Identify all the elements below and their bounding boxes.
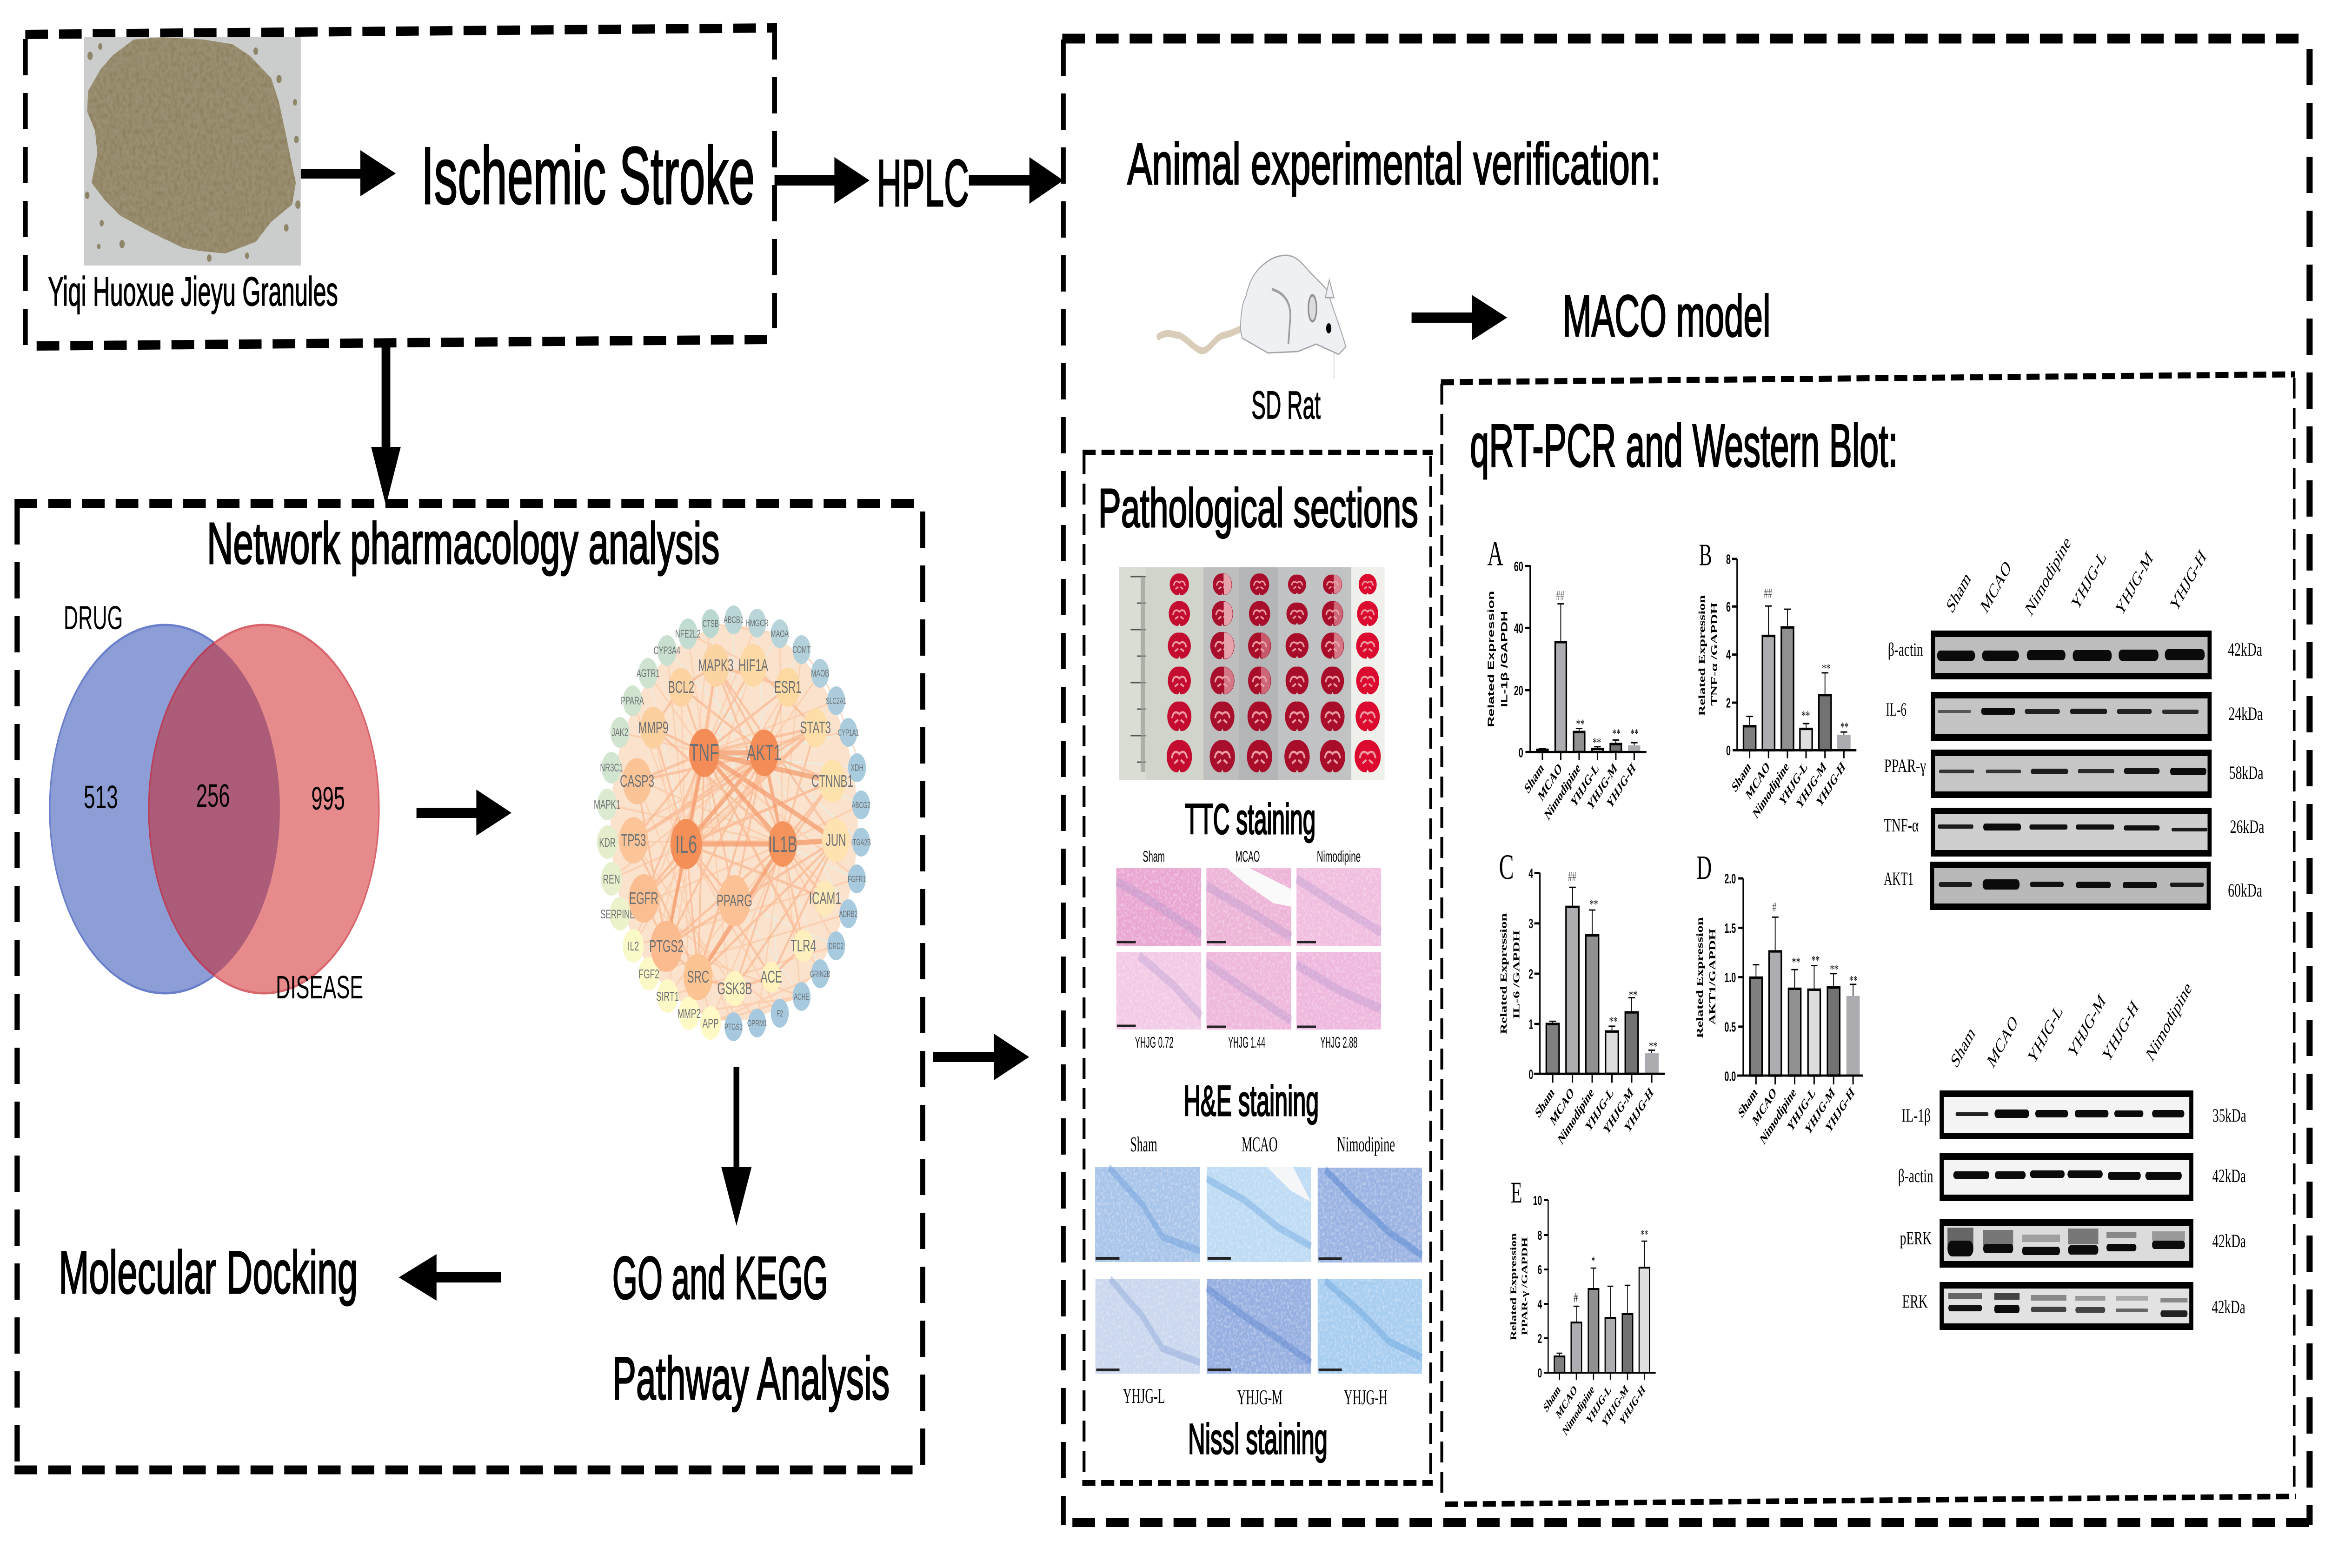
bar chart D: AKT1: Nimodipine xyxy=(1758,1084,1798,1148)
bar chart A: IL-1 beta xyxy=(1486,533,1647,823)
bar chart B: TNF alpha: Sham xyxy=(1730,758,1753,795)
bar chart A: IL-1 beta: 40 xyxy=(1514,621,1523,636)
lane labels: second blot: YHJG-M xyxy=(2066,990,2108,1063)
outer ring nodes: PTGS1 xyxy=(724,1023,743,1032)
bar chart D: AKT1: 2.0 xyxy=(1724,871,1736,887)
bar chart D: AKT1: ** xyxy=(1811,954,1820,968)
H&E group labels: MCAO xyxy=(1236,848,1260,865)
molecular weights: first set xyxy=(2228,639,2265,901)
middle ring nodes: ACE xyxy=(761,968,782,986)
molecular weights: first set: 60kDa xyxy=(2228,880,2262,901)
arrow: enrichment to docking xyxy=(399,1254,501,1301)
blot strips: second set xyxy=(1942,1094,2191,1327)
protein labels: first set: PPAR-γ xyxy=(1884,756,1926,777)
H&E group labels: Nimodipine xyxy=(1317,848,1361,865)
heading: network pharmacology: Network pharmacology analysis xyxy=(207,511,720,577)
protein labels: second set: IL-1β xyxy=(1901,1105,1931,1126)
outer ring nodes: APP xyxy=(703,1016,719,1030)
hub nodes: IL6 xyxy=(675,830,697,858)
bar chart D: AKT1: YHJG-L xyxy=(1786,1084,1817,1135)
protein labels: first set: AKT1 xyxy=(1884,869,1913,890)
network edges xyxy=(607,620,861,1027)
dashed frame: animal panel xyxy=(1062,39,2312,1525)
bar chart E: PPAR gamma: 10 xyxy=(1533,1193,1542,1208)
panel: pathological sections xyxy=(1083,452,1433,1486)
Nissl group labels: MCAO xyxy=(1242,1133,1278,1156)
protein labels: second set: pERK xyxy=(1900,1228,1932,1249)
outer ring nodes: MAOB xyxy=(811,668,829,679)
bar chart C: IL-6: C xyxy=(1499,847,1514,887)
venn diagram xyxy=(50,599,379,1006)
bar chart E: PPAR gamma: Sham xyxy=(1541,1382,1562,1415)
bar chart B: TNF alpha: 4 xyxy=(1726,648,1731,663)
lane labels: first blot: Sham xyxy=(1943,567,1973,617)
panel: network pharmacology analysis xyxy=(14,504,923,1474)
lane labels: second blot xyxy=(1948,977,2194,1072)
label: MACO model: MACO model xyxy=(1563,284,1771,349)
bar chart C: IL-6: YHJG-L xyxy=(1584,1084,1615,1135)
outer ring nodes: HMGCR xyxy=(745,618,769,629)
Nissl group labels: Nimodipine xyxy=(1337,1133,1395,1156)
bar chart C: IL-6 xyxy=(1499,847,1665,1148)
Nissl group labels: YHJG-H xyxy=(1344,1386,1388,1409)
bar chart A: IL-1 beta: ## xyxy=(1556,589,1564,603)
outer ring nodes: CYP1A1 xyxy=(838,728,859,738)
molecular weights: first set: 58kDa xyxy=(2229,763,2264,784)
lane labels: first blot: Nimodipine xyxy=(2022,531,2073,620)
H&E group labels xyxy=(1135,848,1361,1051)
bar chart A: IL-1 beta: ** xyxy=(1576,718,1584,732)
outer ring nodes: F2 xyxy=(777,1009,783,1019)
middle ring nodes xyxy=(619,644,853,1006)
protein labels: second set: ERK xyxy=(1902,1291,1928,1312)
western blot: first membrane set xyxy=(1884,531,2265,907)
venn diagram: DRUG xyxy=(64,599,123,637)
bar chart D: AKT1: # xyxy=(1772,900,1776,915)
Nissl group labels: YHJG-M xyxy=(1237,1386,1282,1409)
outer ring nodes: IL2 xyxy=(628,939,639,953)
heading: animal experimental verification: Animal experimental verification: xyxy=(1127,132,1661,197)
middle ring nodes: ICAM1 xyxy=(809,890,841,908)
bar chart C: IL-6: Related Expression xyxy=(1499,913,1508,1034)
bar chart B: TNF alpha xyxy=(1697,538,1856,822)
bar chart C: IL-6: Sham xyxy=(1533,1084,1556,1121)
bar chart B: TNF alpha: YHJG-H xyxy=(1814,758,1847,811)
bar chart E: PPAR gamma: 4 xyxy=(1538,1297,1542,1311)
bar chart A: IL-1 beta: 20 xyxy=(1514,684,1523,698)
heading: qRT-PCR and Western Blot: qRT-PCR and Western Blot: xyxy=(1470,412,1898,479)
middle ring nodes: PPARG xyxy=(717,892,752,910)
Nissl group labels: YHJG-L xyxy=(1123,1384,1165,1408)
panel: animal experimental verification xyxy=(1062,39,2312,1525)
bar charts A to D xyxy=(1486,533,1863,1148)
outer ring nodes: ITGA2B xyxy=(851,838,871,848)
lane labels: first blot: MCAO xyxy=(1978,556,2014,617)
outer ring nodes: OPRM1 xyxy=(747,1019,767,1029)
outer ring nodes: ABCB1 xyxy=(724,614,744,625)
bar chart C: IL-6: 1 xyxy=(1528,1017,1533,1032)
bar chart E: PPAR gamma: YHJG-M xyxy=(1601,1382,1630,1430)
bar chart E: PPAR gamma: YHJG-L xyxy=(1585,1382,1613,1428)
bar chart E: PPAR gamma: E xyxy=(1511,1176,1522,1209)
lane labels: second blot: YHJG-L xyxy=(2025,999,2065,1068)
molecular weights: first set: 24kDa xyxy=(2228,704,2263,724)
middle ring nodes: CASP3 xyxy=(620,772,654,791)
bar chart A: IL-1 beta: ** xyxy=(1612,727,1621,742)
bar chart D: AKT1 xyxy=(1695,849,1863,1148)
arrow: network to enrichment xyxy=(721,1067,751,1226)
outer ring nodes: KDR xyxy=(599,836,616,850)
H&E group labels: YHJG 2.88 xyxy=(1320,1034,1357,1051)
bar chart D: AKT1: MCAO xyxy=(1751,1084,1778,1129)
micrographs: H&E staining xyxy=(1116,868,1381,1030)
bar chart B: TNF alpha: B xyxy=(1699,538,1712,572)
bar chart B: TNF alpha: ## xyxy=(1764,586,1772,601)
bar chart B: TNF alpha: 8 xyxy=(1726,552,1731,567)
heading: ischemic stroke: Ischemic Stroke xyxy=(421,130,755,221)
bar chart A: IL-1 beta: YHJG-L xyxy=(1569,760,1601,811)
Nissl group labels: Sham xyxy=(1130,1133,1157,1156)
middle ring nodes: HIF1A xyxy=(738,657,768,675)
bar chart D: AKT1: YHJG-H xyxy=(1824,1084,1856,1136)
bar chart B: TNF alpha: ** xyxy=(1840,720,1849,735)
outer ring nodes xyxy=(594,605,871,1041)
bar chart B: TNF alpha: YHJG-M xyxy=(1795,758,1828,812)
venn diagram: 256 xyxy=(196,778,230,814)
caption: H&E staining: H&E staining xyxy=(1184,1077,1319,1125)
bar chart D: AKT1: YHJG-M xyxy=(1803,1084,1837,1138)
outer ring nodes: PPARA xyxy=(621,695,644,707)
middle ring nodes: TLR4 xyxy=(790,937,816,955)
bar chart A: IL-1 beta: 0 xyxy=(1519,746,1523,761)
venn diagram: DISEASE xyxy=(276,970,363,1006)
hub nodes: AKT1 xyxy=(747,741,782,765)
bar chart A: IL-1 beta: MCAO xyxy=(1536,760,1564,804)
bar chart B: TNF alpha: YHJG-L xyxy=(1778,758,1809,809)
bar chart E: PPAR gamma: PPAR-γ /GAPDH xyxy=(1520,1237,1529,1335)
outer ring nodes: ADRB2 xyxy=(839,910,857,919)
lane labels: second blot: MCAO xyxy=(1985,1010,2020,1072)
outer ring nodes: FGF2 xyxy=(638,967,659,981)
protein labels: first set xyxy=(1884,639,1926,890)
middle ring nodes: PTGS2 xyxy=(649,937,684,956)
middle ring nodes: EGFR xyxy=(629,890,658,908)
bar chart C: IL-6: ** xyxy=(1609,1015,1617,1029)
outer ring nodes: JAK2 xyxy=(611,727,628,739)
protein labels: second set xyxy=(1898,1105,1933,1312)
bar chart B: TNF alpha: Related Expression xyxy=(1697,595,1707,716)
outer ring nodes: ACHE xyxy=(794,992,809,1002)
bar chart E: PPAR gamma: Nimodipine xyxy=(1561,1382,1596,1439)
outer ring nodes: SLC2A1 xyxy=(826,697,846,706)
lane labels: first blot: YHJG-M xyxy=(2113,547,2155,620)
text: GO and KEGG: GO and KEGG xyxy=(612,1244,828,1312)
bar chart A: IL-1 beta: YHJG-H xyxy=(1605,760,1637,812)
arrow: rat to model xyxy=(1412,295,1507,340)
bar chart E: PPAR gamma xyxy=(1509,1176,1656,1439)
middle ring nodes: SRC xyxy=(687,968,709,986)
western blot: second membrane set xyxy=(1898,977,2246,1327)
middle ring nodes: BCL2 xyxy=(668,678,694,697)
protein labels: first set: TNF-α xyxy=(1884,815,1919,836)
panel: drug and disease xyxy=(25,23,775,346)
bar chart D: AKT1: ** xyxy=(1792,956,1800,970)
label: HPLC: HPLC xyxy=(877,146,969,220)
outer ring nodes: CTSB xyxy=(703,618,719,629)
middle ring nodes: CTNNB1 xyxy=(811,772,853,791)
bar chart A: IL-1 beta: Related Expression xyxy=(1486,591,1496,727)
bar chart B: TNF alpha: MCAO xyxy=(1744,758,1772,803)
venn diagram: 995 xyxy=(311,781,345,817)
lane labels: second blot: Nimodipine xyxy=(2143,977,2194,1065)
H&E group labels: Sham xyxy=(1143,848,1165,865)
blot bands: second set xyxy=(1947,1110,2187,1317)
panel: qRT-PCR and Western Blot xyxy=(1441,374,2296,1504)
bar chart E: PPAR gamma: # xyxy=(1574,1290,1578,1305)
blot strips: first set xyxy=(1932,634,2210,907)
lane labels: second blot: YHJG-H xyxy=(2100,996,2141,1066)
hub nodes xyxy=(671,729,797,869)
arrow: granules to stroke xyxy=(301,150,396,196)
blot bands: first set xyxy=(1937,649,2207,890)
bar chart A: IL-1 beta: A xyxy=(1488,533,1503,573)
bar chart D: AKT1: Related Expression xyxy=(1695,917,1705,1038)
bar chart A: IL-1 beta: Sham xyxy=(1522,760,1546,797)
lane labels: second blot: Sham xyxy=(1948,1022,1978,1072)
bar chart D: AKT1: 1.0 xyxy=(1724,970,1736,985)
bar chart B: TNF alpha: 0 xyxy=(1726,744,1731,758)
outer ring nodes: SERPINE1 xyxy=(600,907,639,921)
protein labels: first set: IL-6 xyxy=(1886,699,1906,720)
caption: Nissl staining: Nissl staining xyxy=(1188,1415,1328,1463)
arrow: venn to network xyxy=(417,790,512,836)
text: molecular docking: Molecular Docking xyxy=(59,1238,358,1306)
protein labels: first set: β-actin xyxy=(1888,639,1923,660)
micrographs: Nissl staining xyxy=(1095,1167,1422,1374)
H&E group labels: YHJG 1.44 xyxy=(1228,1034,1265,1051)
bar chart A: IL-1 beta: 60 xyxy=(1514,559,1523,574)
caption: granules: Yiqi Huoxue Jieyu Granules xyxy=(48,269,338,314)
arrow: network to pathological sections xyxy=(933,1034,1029,1080)
bar chart A: IL-1 beta: IL-1β /GAPDH xyxy=(1499,611,1509,707)
arrow: stroke to HPLC xyxy=(775,157,870,204)
dashed frame: pathology panel xyxy=(1083,452,1433,1486)
bar chart D: AKT1: 0.0 xyxy=(1724,1069,1736,1084)
bar chart A: IL-1 beta: YHJG-M xyxy=(1586,760,1619,813)
outer ring nodes: SIRT1 xyxy=(656,989,679,1003)
outer ring nodes: DRD2 xyxy=(829,942,844,951)
photo: granules xyxy=(84,37,301,266)
bar chart C: IL-6: 3 xyxy=(1528,917,1533,931)
outer ring nodes: ABCG2 xyxy=(852,801,870,811)
dashed frame: drug panel xyxy=(25,23,775,346)
bar chart E: PPAR gamma: YHJG-H xyxy=(1618,1382,1647,1428)
bar chart A: IL-1 beta: ** xyxy=(1593,736,1601,751)
outer ring nodes: XDH xyxy=(850,762,864,773)
outer ring nodes: MAPK1 xyxy=(594,797,620,811)
photo: TTC stained brain slices xyxy=(1119,567,1385,780)
H&E group labels: YHJG 0.72 xyxy=(1135,1034,1174,1051)
bar chart D: AKT1: 0.5 xyxy=(1724,1020,1736,1035)
heading: pathological sections: Pathological sections xyxy=(1098,477,1418,538)
lane labels: first blot xyxy=(1943,531,2209,620)
bar chart D: AKT1: ** xyxy=(1849,974,1858,988)
bar chart D: AKT1: Sham xyxy=(1736,1084,1759,1121)
text: pathway analysis: Pathway Analysis xyxy=(612,1344,890,1412)
bar chart E: PPAR gamma: * xyxy=(1591,1254,1595,1268)
bar chart E: PPAR gamma: ** xyxy=(1641,1228,1648,1241)
dashed frame: network panel xyxy=(14,504,923,1474)
bar chart D: AKT1: ** xyxy=(1830,963,1838,977)
bar chart C: IL-6: 4 xyxy=(1528,866,1534,881)
bar chart E: PPAR gamma: 8 xyxy=(1538,1228,1542,1242)
outer ring nodes: MMP2 xyxy=(678,1006,701,1021)
outer ring nodes: AGTR1 xyxy=(637,668,660,680)
outer ring nodes: REN xyxy=(603,872,620,886)
middle ring nodes: ESR1 xyxy=(774,678,802,697)
outer ring nodes: FGFR1 xyxy=(848,875,866,884)
outer ring nodes: NFE2L2 xyxy=(675,628,701,640)
Nissl group labels xyxy=(1123,1133,1395,1409)
bar chart C: IL-6: YHJG-H xyxy=(1623,1084,1655,1136)
bar chart A: IL-1 beta: ** xyxy=(1630,727,1639,742)
caption: TTC staining: TTC staining xyxy=(1185,796,1315,843)
bar chart E: PPAR gamma: 2 xyxy=(1538,1331,1542,1346)
middle ring nodes: MAPK3 xyxy=(698,657,733,675)
outer ring nodes: NR3C1 xyxy=(600,762,623,774)
bar chart C: IL-6: Nimodipine xyxy=(1556,1084,1595,1148)
molecular weights: second set: 42kDa xyxy=(2212,1231,2246,1252)
bar chart B: TNF alpha: 2 xyxy=(1726,696,1731,711)
bar chart B: TNF alpha: ** xyxy=(1822,662,1830,676)
bar chart C: IL-6: ## xyxy=(1568,870,1576,884)
arrow: HPLC to animal verification xyxy=(969,157,1063,204)
bar chart C: IL-6: 2 xyxy=(1528,967,1533,982)
arrow: stroke to network pharmacology xyxy=(371,345,401,505)
molecular weights: second set xyxy=(2212,1105,2246,1318)
bar chart E: PPAR gamma: 6 xyxy=(1538,1262,1542,1277)
bar chart E: PPAR gamma: MCAO xyxy=(1554,1382,1579,1422)
middle ring nodes: MMP9 xyxy=(638,719,668,737)
label: SD rat: SD Rat xyxy=(1251,383,1321,427)
outer ring nodes: MAOA xyxy=(771,628,789,639)
molecular weights: first set: 42kDa xyxy=(2228,639,2262,660)
bar chart C: IL-6: ** xyxy=(1629,988,1637,1003)
bar chart C: IL-6: ** xyxy=(1649,1039,1657,1054)
protein labels: second set: β-actin xyxy=(1898,1166,1933,1187)
lane labels: first blot: YHJG-H xyxy=(2167,545,2209,616)
middle ring nodes: GSK3B xyxy=(717,980,752,998)
bar chart C: IL-6: YHJG-M xyxy=(1601,1084,1635,1138)
network graph xyxy=(594,605,871,1041)
bar chart E: PPAR gamma: Related Expression xyxy=(1509,1233,1518,1340)
outer ring nodes: COMT xyxy=(792,644,810,655)
middle ring nodes: STAT3 xyxy=(800,719,831,737)
bar chart D: AKT1: 1.5 xyxy=(1724,921,1736,936)
molecular weights: second set: 35kDa xyxy=(2212,1105,2246,1126)
bar chart B: TNF alpha: TNF-α /GAPDH xyxy=(1709,602,1720,706)
lane labels: first blot: YHJG-L xyxy=(2069,545,2109,614)
middle ring nodes: JUN xyxy=(826,831,846,850)
bar chart A: IL-1 beta: Nimodipine xyxy=(1543,760,1582,823)
bar chart C: IL-6: 0 xyxy=(1528,1067,1533,1083)
hub nodes: TNF xyxy=(690,739,719,766)
hub nodes: IL1B xyxy=(768,832,797,857)
middle ring nodes: TP53 xyxy=(621,831,646,850)
bar chart B: TNF alpha: 6 xyxy=(1726,600,1731,615)
bar chart C: IL-6: MCAO xyxy=(1548,1084,1576,1129)
bar chart C: IL-6: IL-6 /GAPDH xyxy=(1511,930,1521,1019)
molecular weights: first set: 26kDa xyxy=(2230,817,2265,837)
bar chart E: PPAR gamma: 0 xyxy=(1538,1366,1542,1380)
bar chart C: IL-6: ** xyxy=(1590,897,1598,912)
bar chart B: TNF alpha: ** xyxy=(1801,709,1810,724)
venn diagram: 513 xyxy=(84,779,118,816)
icon: SD rat xyxy=(1159,255,1346,379)
bar chart D: AKT1: AKT1/GAPDH xyxy=(1707,928,1718,1025)
dashed frame: qRT-PCR panel xyxy=(1441,374,2296,1504)
outer ring nodes: CYP3A4 xyxy=(654,645,680,657)
molecular weights: second set: 42kDa xyxy=(2212,1166,2246,1187)
bar chart B: TNF alpha: Nimodipine xyxy=(1751,758,1791,822)
outer ring nodes: GRIN2B xyxy=(810,970,830,979)
bar chart D: AKT1: D xyxy=(1696,849,1712,887)
molecular weights: second set: 42kDa xyxy=(2212,1297,2245,1318)
